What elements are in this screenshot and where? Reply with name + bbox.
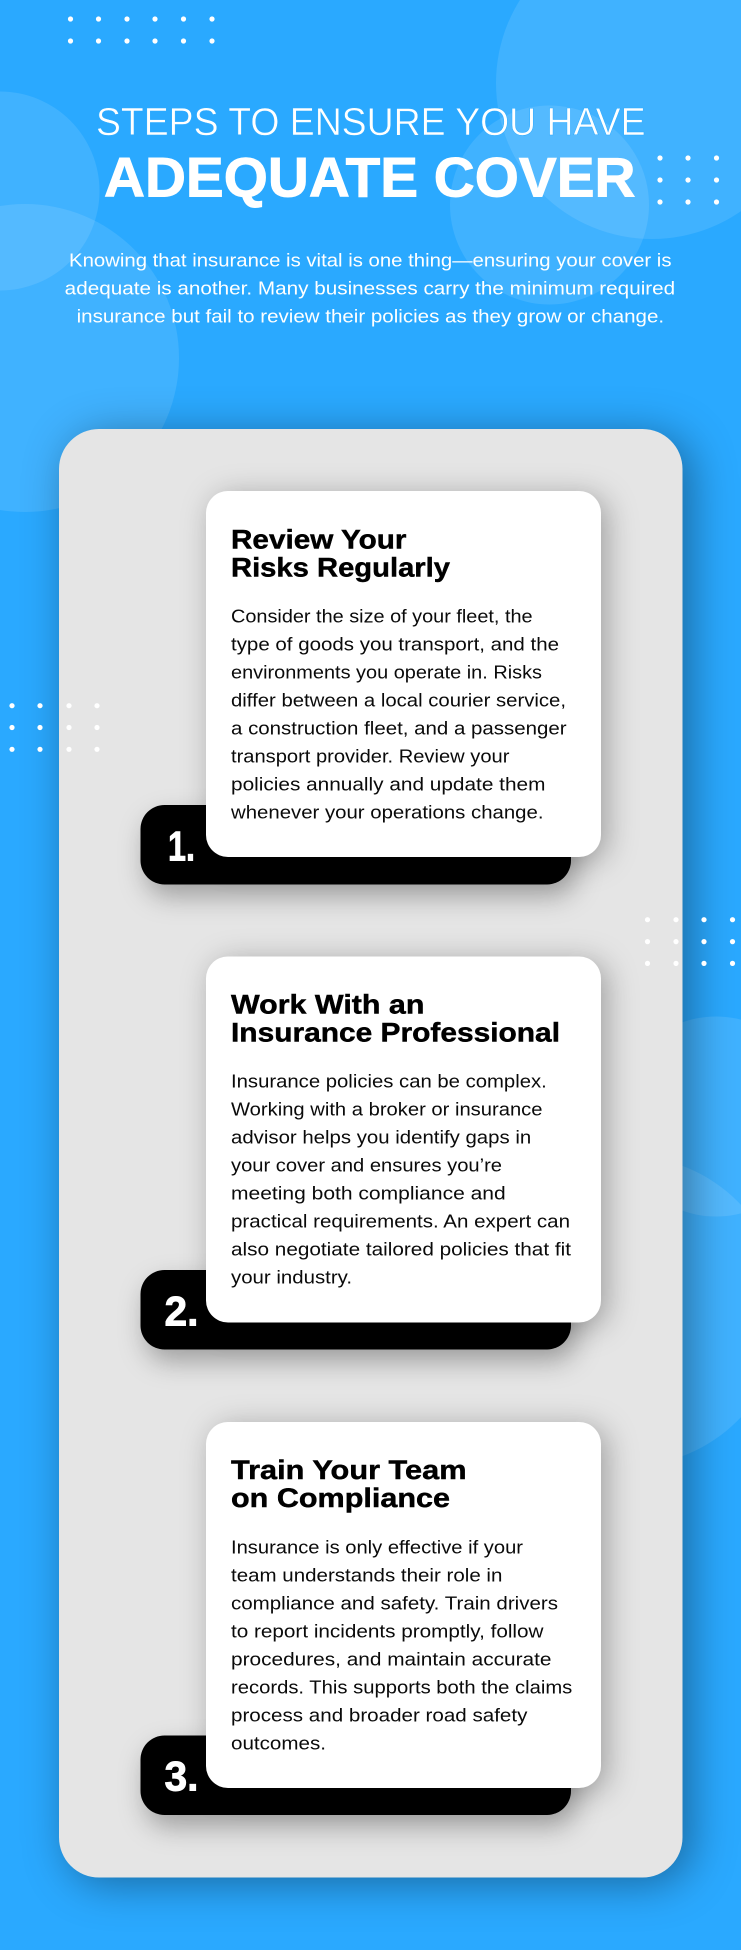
step 1 [140, 491, 601, 884]
heading 1: Review Your [231, 525, 407, 555]
body text 1: differ between a local courier service, [231, 689, 566, 710]
body text 1: a construction fleet, and a passenger [231, 717, 567, 738]
body text 3: Insurance is only effective if your [231, 1536, 523, 1557]
intro paragraph: Knowing that insurance is vital is one thing—ensuring your cover is [69, 250, 672, 270]
title [96, 101, 646, 208]
panel: grey steps container [59, 429, 682, 1878]
body text 3: process and broader road safety [231, 1704, 528, 1725]
card 2 [206, 956, 601, 1322]
body text 3 [231, 1536, 572, 1753]
body text 2: your cover and ensures you’re [231, 1155, 502, 1176]
number 1: 1. [168, 823, 195, 870]
background circles [0, 0, 741, 1466]
body text 2 [231, 1071, 571, 1288]
heading 2: Insurance Professional [231, 1018, 560, 1048]
body text 3: records. This supports both the claims [231, 1676, 572, 1697]
number 2: 2. [164, 1287, 198, 1334]
body text 1: whenever your operations change. [230, 801, 544, 822]
body text 2: practical requirements. An expert can [231, 1211, 570, 1232]
dot grid: left [9, 703, 100, 752]
heading 3: Train Your Team [231, 1455, 466, 1485]
step 2 [140, 956, 601, 1350]
body text 2: also negotiate tailored policies that fit [231, 1239, 571, 1260]
card 1 [206, 491, 601, 857]
body text 3: compliance and safety. Train drivers [231, 1592, 558, 1613]
body text 1: environments you operate in. Risks [231, 661, 542, 682]
body text 1: Consider the size of your fleet, the [231, 605, 533, 626]
body text 1: type of goods you transport, and the [231, 633, 559, 654]
body text 1: transport provider. Review your [231, 745, 509, 766]
number 3: 3. [164, 1752, 198, 1800]
body text 2: advisor helps you identify gaps in [231, 1127, 531, 1148]
heading 1: Risks Regularly [231, 553, 450, 583]
number bar 3 [140, 1736, 571, 1815]
intro paragraph [65, 250, 675, 326]
title: STEPS TO ENSURE YOU HAVE [96, 101, 646, 144]
number bar 1 [140, 805, 571, 884]
heading 3 [231, 1455, 466, 1513]
title: ADEQUATE COVER [104, 146, 636, 208]
body text 1 [230, 605, 567, 822]
body text 2: meeting both compliance and [231, 1183, 506, 1204]
body text 3: to report incidents promptly, follow [231, 1620, 544, 1641]
dot grid: right [645, 917, 735, 966]
body text 3: procedures, and maintain accurate [231, 1648, 552, 1669]
heading 2: Work With an [231, 990, 424, 1020]
body text 3: team understands their role in [231, 1564, 502, 1585]
intro paragraph: adequate is another. Many businesses carry the minimum required [65, 278, 675, 298]
number bar 2 [140, 1270, 571, 1350]
heading 2 [231, 990, 560, 1048]
heading 1 [231, 525, 450, 583]
dot grid: beside title [657, 155, 719, 205]
dot grid: top left [68, 16, 215, 44]
heading 3: on Compliance [231, 1483, 450, 1513]
intro paragraph: insurance but fail to review their policies as they grow or change. [77, 306, 664, 326]
card 3 [206, 1422, 601, 1788]
body text 2: Working with a broker or insurance [231, 1099, 542, 1120]
body text 2: your industry. [231, 1267, 352, 1288]
step 3 [140, 1422, 601, 1815]
body text 2: Insurance policies can be complex. [231, 1071, 547, 1092]
body text 3: outcomes. [231, 1732, 326, 1753]
body text 1: policies annually and update them [231, 773, 545, 794]
